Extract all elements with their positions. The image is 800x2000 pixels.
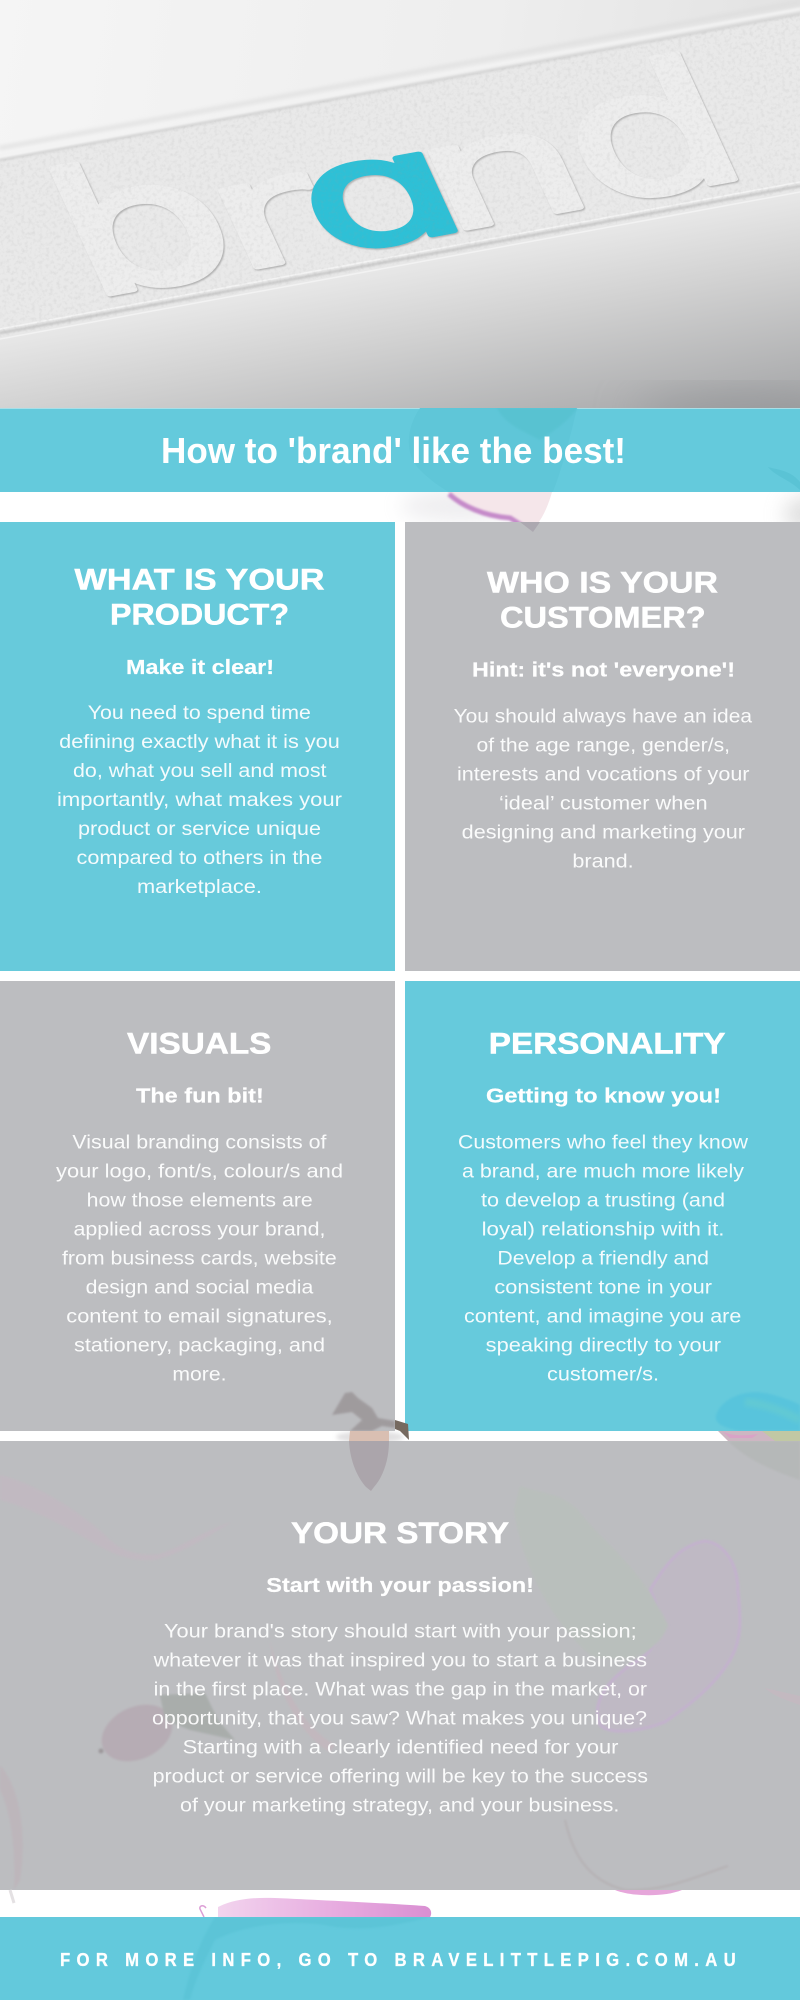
ghost: small rose hip xyxy=(98,1693,234,1762)
body text: product: do, what you sell and most xyxy=(73,761,327,782)
body text: product: defining exactly what it is you xyxy=(59,732,340,753)
subheading: the fun bit: The fun bit! xyxy=(136,1086,264,1108)
body text: personality xyxy=(458,1132,748,1385)
body text: product: importantly, what makes your xyxy=(57,790,343,811)
body text: personality: Customers who feel they know xyxy=(458,1132,748,1153)
heading: what is your product xyxy=(74,563,325,631)
body text: customer: interests and vocations of your xyxy=(457,764,750,785)
ghost: curved stem bottom right xyxy=(606,1882,607,1883)
body text: personality: Develop a friendly and xyxy=(497,1248,709,1269)
footer bar xyxy=(0,1917,800,2000)
body text: visuals: applied across your brand, xyxy=(74,1219,326,1240)
heading: who is your customer xyxy=(487,566,718,634)
body text: visuals: Visual branding consists of xyxy=(72,1132,327,1153)
body text: customer: designing and marketing your xyxy=(462,822,746,843)
body text: customer: of the age range, gender/s, xyxy=(476,735,730,756)
title banner xyxy=(0,408,800,494)
body text: personality: consistent tone in your xyxy=(494,1277,713,1298)
embossed word brand: n xyxy=(385,74,616,265)
heading: who is your customer: WHO IS YOUR xyxy=(487,566,718,599)
heading: your story: YOUR STORY xyxy=(291,1517,509,1550)
flower layer on white gaps xyxy=(336,490,800,1443)
ghost: rose hip in story xyxy=(349,1441,389,1491)
panel: your story xyxy=(0,1441,800,1890)
body text: visuals: more. xyxy=(172,1364,226,1385)
body text: visuals: content to email signatures, xyxy=(66,1306,333,1327)
body text: product: You need to spend time xyxy=(88,703,311,724)
body text: customer xyxy=(454,706,752,872)
heading: personality: PERSONALITY xyxy=(489,1027,726,1060)
flower ghosts in story panel xyxy=(0,1441,800,1890)
body text: visuals: stationery, packaging, and xyxy=(74,1335,325,1356)
body text: story: Starting with a clearly identified need for your xyxy=(183,1738,619,1758)
subheading: make it clear: Make it clear! xyxy=(126,657,274,679)
petal ghost in footer xyxy=(183,1917,430,2000)
subheading: start with your passion: Start with your passion! xyxy=(266,1575,534,1597)
body text: visuals: your logo, font/s, colour/s and xyxy=(56,1161,343,1182)
body text: customer: brand. xyxy=(572,851,634,872)
flower: pink petal in lower gap xyxy=(10,1890,682,1917)
panel: what is your product xyxy=(0,522,395,971)
heading: what is your product: WHAT IS YOUR xyxy=(74,563,325,596)
ghost: blossom bottom right xyxy=(798,1443,799,1477)
body text: product xyxy=(57,703,343,898)
body text: personality: loyal) relationship with it. xyxy=(482,1219,724,1240)
body text: story: product or service offering will be key to the success xyxy=(153,1766,648,1788)
ghost: thin petal xyxy=(270,1640,335,1752)
body text: personality: speaking directly to your xyxy=(486,1335,722,1356)
body text: product: product or service unique xyxy=(78,819,321,840)
embossed word brand: r xyxy=(175,122,354,304)
body text: customer: You should always have an idea xyxy=(454,706,752,727)
embossed word brand: ɑ xyxy=(264,97,490,288)
body text: visuals: how those elements are xyxy=(87,1190,313,1211)
ghost: long petal left xyxy=(0,1475,232,1560)
ghost: green bud xyxy=(649,1597,663,1649)
flower: rose hip crossing panels xyxy=(332,1392,409,1441)
body text: story: of your marketing strategy, and your business. xyxy=(180,1796,619,1816)
body text: story: in the first place. What was the gap in the market, or xyxy=(154,1680,648,1700)
body text: personality: a brand, are much more likely xyxy=(462,1161,745,1182)
body text: story: Your brand's story should start with your passion; xyxy=(164,1622,637,1642)
body text: story xyxy=(152,1622,648,1816)
body text: personality: content, and imagine you are xyxy=(464,1306,741,1327)
embossed word brand: d xyxy=(523,22,776,244)
title text: How to 'brand' like the best! xyxy=(161,430,626,471)
footer text: FOR MORE INFO, GO TO BRAVELITTLEPIG.COM.AU xyxy=(60,1949,742,1970)
heading: who is your customer: CUSTOMER? xyxy=(500,601,706,634)
flower: blossom in gap xyxy=(718,1431,800,1441)
body text: personality: customer/s. xyxy=(547,1364,659,1385)
body text: visuals: design and social media xyxy=(86,1277,314,1298)
body text: personality: to develop a trusting (and xyxy=(481,1190,725,1211)
body text: visuals xyxy=(56,1132,343,1385)
body text: story: whatever it was that inspired you to start a business xyxy=(152,1650,647,1672)
body text: customer: ‘ideal’ customer when xyxy=(499,793,708,814)
body text: product: marketplace. xyxy=(137,877,262,898)
heading: what is your product: PRODUCT? xyxy=(110,598,289,631)
ghost: petal bottom left xyxy=(0,1765,23,1890)
hero photo: embossed brand card xyxy=(0,0,800,428)
panel: personality xyxy=(405,981,800,1431)
embossed word brand: b xyxy=(17,115,267,337)
body text: product: compared to others in the xyxy=(76,848,322,869)
body text: visuals: from business cards, website xyxy=(62,1248,337,1269)
subheading: getting to know you: Getting to know you! xyxy=(486,1086,721,1108)
ghost: petal right edge xyxy=(765,1688,800,1705)
heading: visuals: VISUALS xyxy=(127,1027,271,1060)
body text: story: opportunity, that you saw? What makes you unique? xyxy=(152,1708,647,1730)
blossom ghost in personality panel xyxy=(716,1392,800,1431)
flower ghost in banner xyxy=(409,408,800,494)
panel: who is your customer xyxy=(405,522,800,971)
embossed word brand xyxy=(79,52,740,298)
subheading: hint: Hint: it's not 'everyone'! xyxy=(472,660,735,682)
panel: visuals xyxy=(0,981,395,1431)
ghost: pink carnation xyxy=(597,1541,740,1731)
